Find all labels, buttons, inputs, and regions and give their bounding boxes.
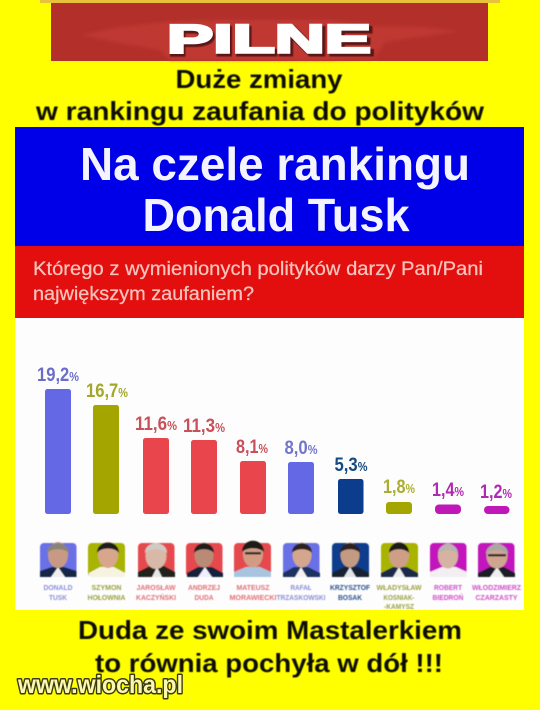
heading: subtitle: Duże zmiany bbox=[176, 64, 343, 94]
name: Szymon Hołownia bbox=[88, 583, 126, 602]
name: Andrzej Duda: DUDA bbox=[194, 593, 214, 602]
name: Andrzej Duda: ANDRZEJ bbox=[188, 583, 220, 592]
portrait: Czarzasty bbox=[478, 543, 515, 577]
portrait: Kosiniak-Kamysz bbox=[381, 542, 418, 577]
name: Krzysztof Bosak: KRZYSZTOF bbox=[330, 583, 370, 592]
portrait: Tusk bbox=[40, 542, 76, 577]
portraits row bbox=[40, 540, 515, 577]
bar: Biedroń bbox=[432, 480, 464, 514]
bar: Kosiniak-Kamysz bbox=[383, 477, 415, 514]
portrait: Morawiecki bbox=[234, 540, 271, 577]
name: Mateusz Morawiecki: MORAWIECKI bbox=[230, 593, 276, 602]
bar: Kaczyński: 11,6% bbox=[135, 414, 177, 435]
question text: Którego z wymienionych polityków darzy Pan/Pani bbox=[33, 259, 483, 280]
name: Mateusz Morawiecki: MATEUSZ bbox=[236, 583, 270, 592]
headline text: Donald Tusk bbox=[142, 189, 410, 241]
heading: subtitle: w rankingu zaufania do polityków bbox=[35, 96, 485, 126]
bar: Czarzasty: 1,2% bbox=[480, 482, 512, 503]
bar: Hołownia bbox=[86, 381, 128, 514]
bar: Bosak bbox=[334, 455, 368, 514]
name: Krzysztof Bosak: BOSAK bbox=[338, 593, 363, 602]
name: Władysław Kosiniak-Kamysz: KOSNIAK- bbox=[384, 593, 415, 602]
bar: Hołownia: 16,7% bbox=[86, 381, 128, 402]
name: Szymon Hołownia: SZYMON bbox=[92, 583, 122, 592]
bar: Morawiecki bbox=[236, 437, 268, 514]
name: Włodzimierz Czarzasty: CZARZASTY bbox=[476, 593, 518, 602]
bar: Trzaskowski: 8,0% bbox=[284, 438, 318, 459]
watermark: www.wiocha.pl bbox=[17, 671, 183, 699]
bar: Morawiecki: 8,1% bbox=[236, 437, 268, 458]
name: Jarosław Kaczyński: KACZYŃSKI bbox=[136, 593, 176, 602]
name: Rafał Trzaskowski: RAFAŁ bbox=[290, 583, 312, 592]
bar chart bbox=[37, 365, 512, 514]
footer comment text: to równia pochyła w dół !!! bbox=[95, 648, 443, 678]
name: Władysław Kosiniak-Kamysz bbox=[376, 583, 422, 611]
portrait: Trzaskowski bbox=[283, 542, 320, 577]
bar: Duda: 11,3% bbox=[183, 416, 225, 437]
bar: Tusk bbox=[37, 365, 79, 514]
name: Rafał Trzaskowski bbox=[276, 583, 326, 602]
portrait: Bosak bbox=[332, 542, 369, 577]
question text bbox=[33, 259, 483, 305]
name: Robert Biedroń: ROBERT bbox=[434, 583, 462, 592]
bar: Tusk: 19,2% bbox=[37, 365, 79, 386]
bar: Duda bbox=[183, 416, 225, 514]
panel: red question bbox=[15, 246, 524, 318]
bar: Kaczyński bbox=[135, 414, 177, 514]
portrait: Biedroń bbox=[430, 543, 467, 577]
bar: Kosiniak-Kamysz: 1,8% bbox=[383, 477, 415, 498]
name: Włodzimierz Czarzasty bbox=[472, 583, 521, 602]
name: Robert Biedroń: BIEDROŃ bbox=[432, 593, 464, 602]
bar: Biedroń: 1,4% bbox=[432, 480, 464, 501]
footer comment text bbox=[78, 615, 462, 678]
name: Jarosław Kaczyński bbox=[136, 583, 176, 602]
name: Mateusz Morawiecki bbox=[230, 583, 276, 602]
bar: Trzaskowski bbox=[284, 438, 318, 514]
question text: największym zaufaniem? bbox=[33, 284, 254, 305]
name: Robert Biedroń bbox=[432, 583, 464, 602]
banner: PILNE bbox=[40, 0, 500, 64]
bar: Czarzasty bbox=[480, 482, 512, 514]
name: Donald Tusk: DONALD bbox=[44, 583, 73, 592]
name: Krzysztof Bosak bbox=[330, 583, 370, 602]
footer comment text: Duda ze swoim Mastalerkiem bbox=[78, 615, 462, 645]
name: Jarosław Kaczyński: JAROSŁAW bbox=[136, 583, 176, 592]
candidate names bbox=[44, 583, 521, 611]
name: Szymon Hołownia: HOŁOWNIA bbox=[88, 593, 126, 602]
name: Donald Tusk bbox=[44, 583, 73, 602]
banner text shadow: PILNE bbox=[168, 20, 374, 64]
headline text bbox=[80, 138, 470, 241]
portrait: Kaczyński bbox=[138, 543, 175, 577]
heading: subtitle bbox=[35, 64, 485, 126]
panel: blue headline bbox=[15, 127, 524, 246]
bar: Bosak: 5,3% bbox=[334, 455, 368, 476]
portrait: Duda bbox=[186, 542, 223, 577]
name: Andrzej Duda bbox=[188, 583, 220, 602]
name: Włodzimierz Czarzasty: WŁODZIMIERZ bbox=[472, 583, 521, 592]
banner text: PILNE bbox=[167, 18, 371, 62]
name: Donald Tusk: TUSK bbox=[49, 593, 68, 602]
name: Rafał Trzaskowski: TRZASKOWSKI bbox=[276, 593, 326, 602]
name: Władysław Kosiniak-Kamysz: -KAMYSZ bbox=[384, 602, 414, 611]
panel: white chart area bbox=[15, 318, 524, 610]
name: Władysław Kosiniak-Kamysz: WŁADYSŁAW bbox=[376, 583, 422, 592]
headline text: Na czele rankingu bbox=[80, 138, 470, 190]
portrait: Hołownia bbox=[88, 542, 125, 577]
